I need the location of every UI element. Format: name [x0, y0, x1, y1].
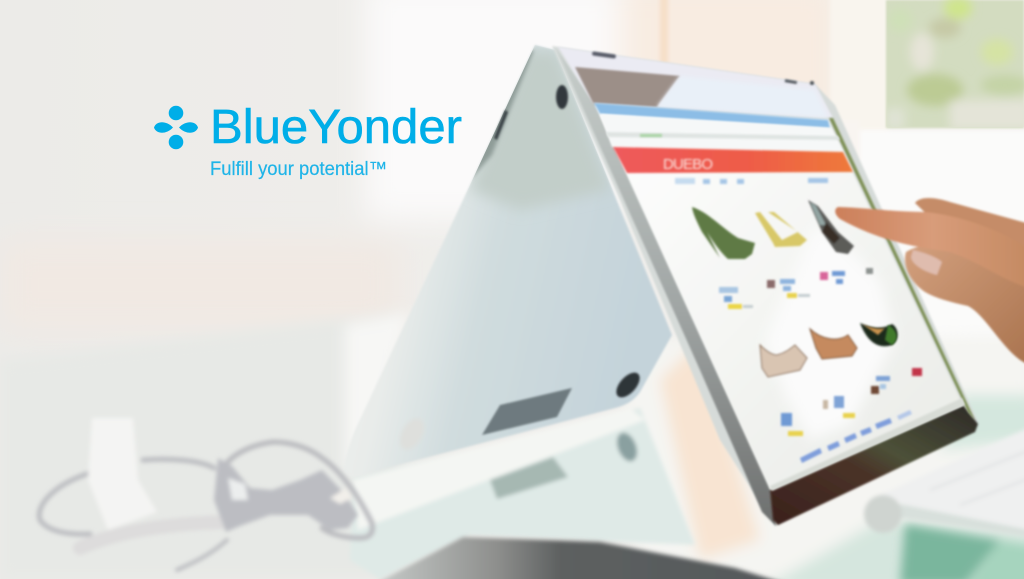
Blue Yonder logo: [154, 101, 462, 180]
banner text: DUEBO: [663, 156, 713, 173]
foliage: [885, 0, 1024, 130]
shoe: yellow sandal: [755, 212, 807, 247]
hand pointing at the screen: [835, 198, 1024, 366]
white reflection on screen: [765, 225, 895, 440]
tagline: Fulfill your potential™: [210, 159, 387, 180]
rubber foot: [612, 368, 644, 402]
back finger: [915, 198, 1024, 262]
laptop screen: [552, 46, 978, 526]
screen frame: [552, 46, 978, 526]
desk reflection of laptop: [350, 408, 695, 579]
background: room and desk: [351, 0, 1024, 579]
screen bottom strip: [770, 398, 965, 491]
fingernail: [911, 250, 942, 275]
red banner: [613, 147, 853, 173]
camera details: [592, 51, 814, 85]
browser chrome: [594, 103, 830, 128]
shoe: black green: [860, 323, 898, 346]
bezel reflection: [575, 67, 680, 107]
bottom bezel: [770, 405, 978, 525]
display: [595, 105, 963, 490]
desk teal reflection: [900, 524, 1024, 579]
green edge: [829, 118, 975, 420]
index finger: [835, 207, 1024, 288]
palm and lower finger: [905, 245, 1024, 366]
shoe: green heel: [692, 207, 755, 259]
logo icon: [154, 106, 198, 149]
vent: [482, 388, 572, 435]
shoe: dark heel: [808, 200, 854, 254]
glasses: [39, 418, 372, 570]
keyboard: [864, 427, 1024, 537]
laptop base panel: [343, 45, 672, 477]
shoe: tan: [810, 329, 857, 359]
tablet on desk: [373, 537, 790, 579]
product captions: [719, 268, 922, 436]
footer links: [800, 410, 912, 463]
logo wordmark: BlueYonder: [210, 101, 462, 154]
shoe: beige: [760, 345, 807, 377]
nav tabs: [675, 178, 828, 184]
